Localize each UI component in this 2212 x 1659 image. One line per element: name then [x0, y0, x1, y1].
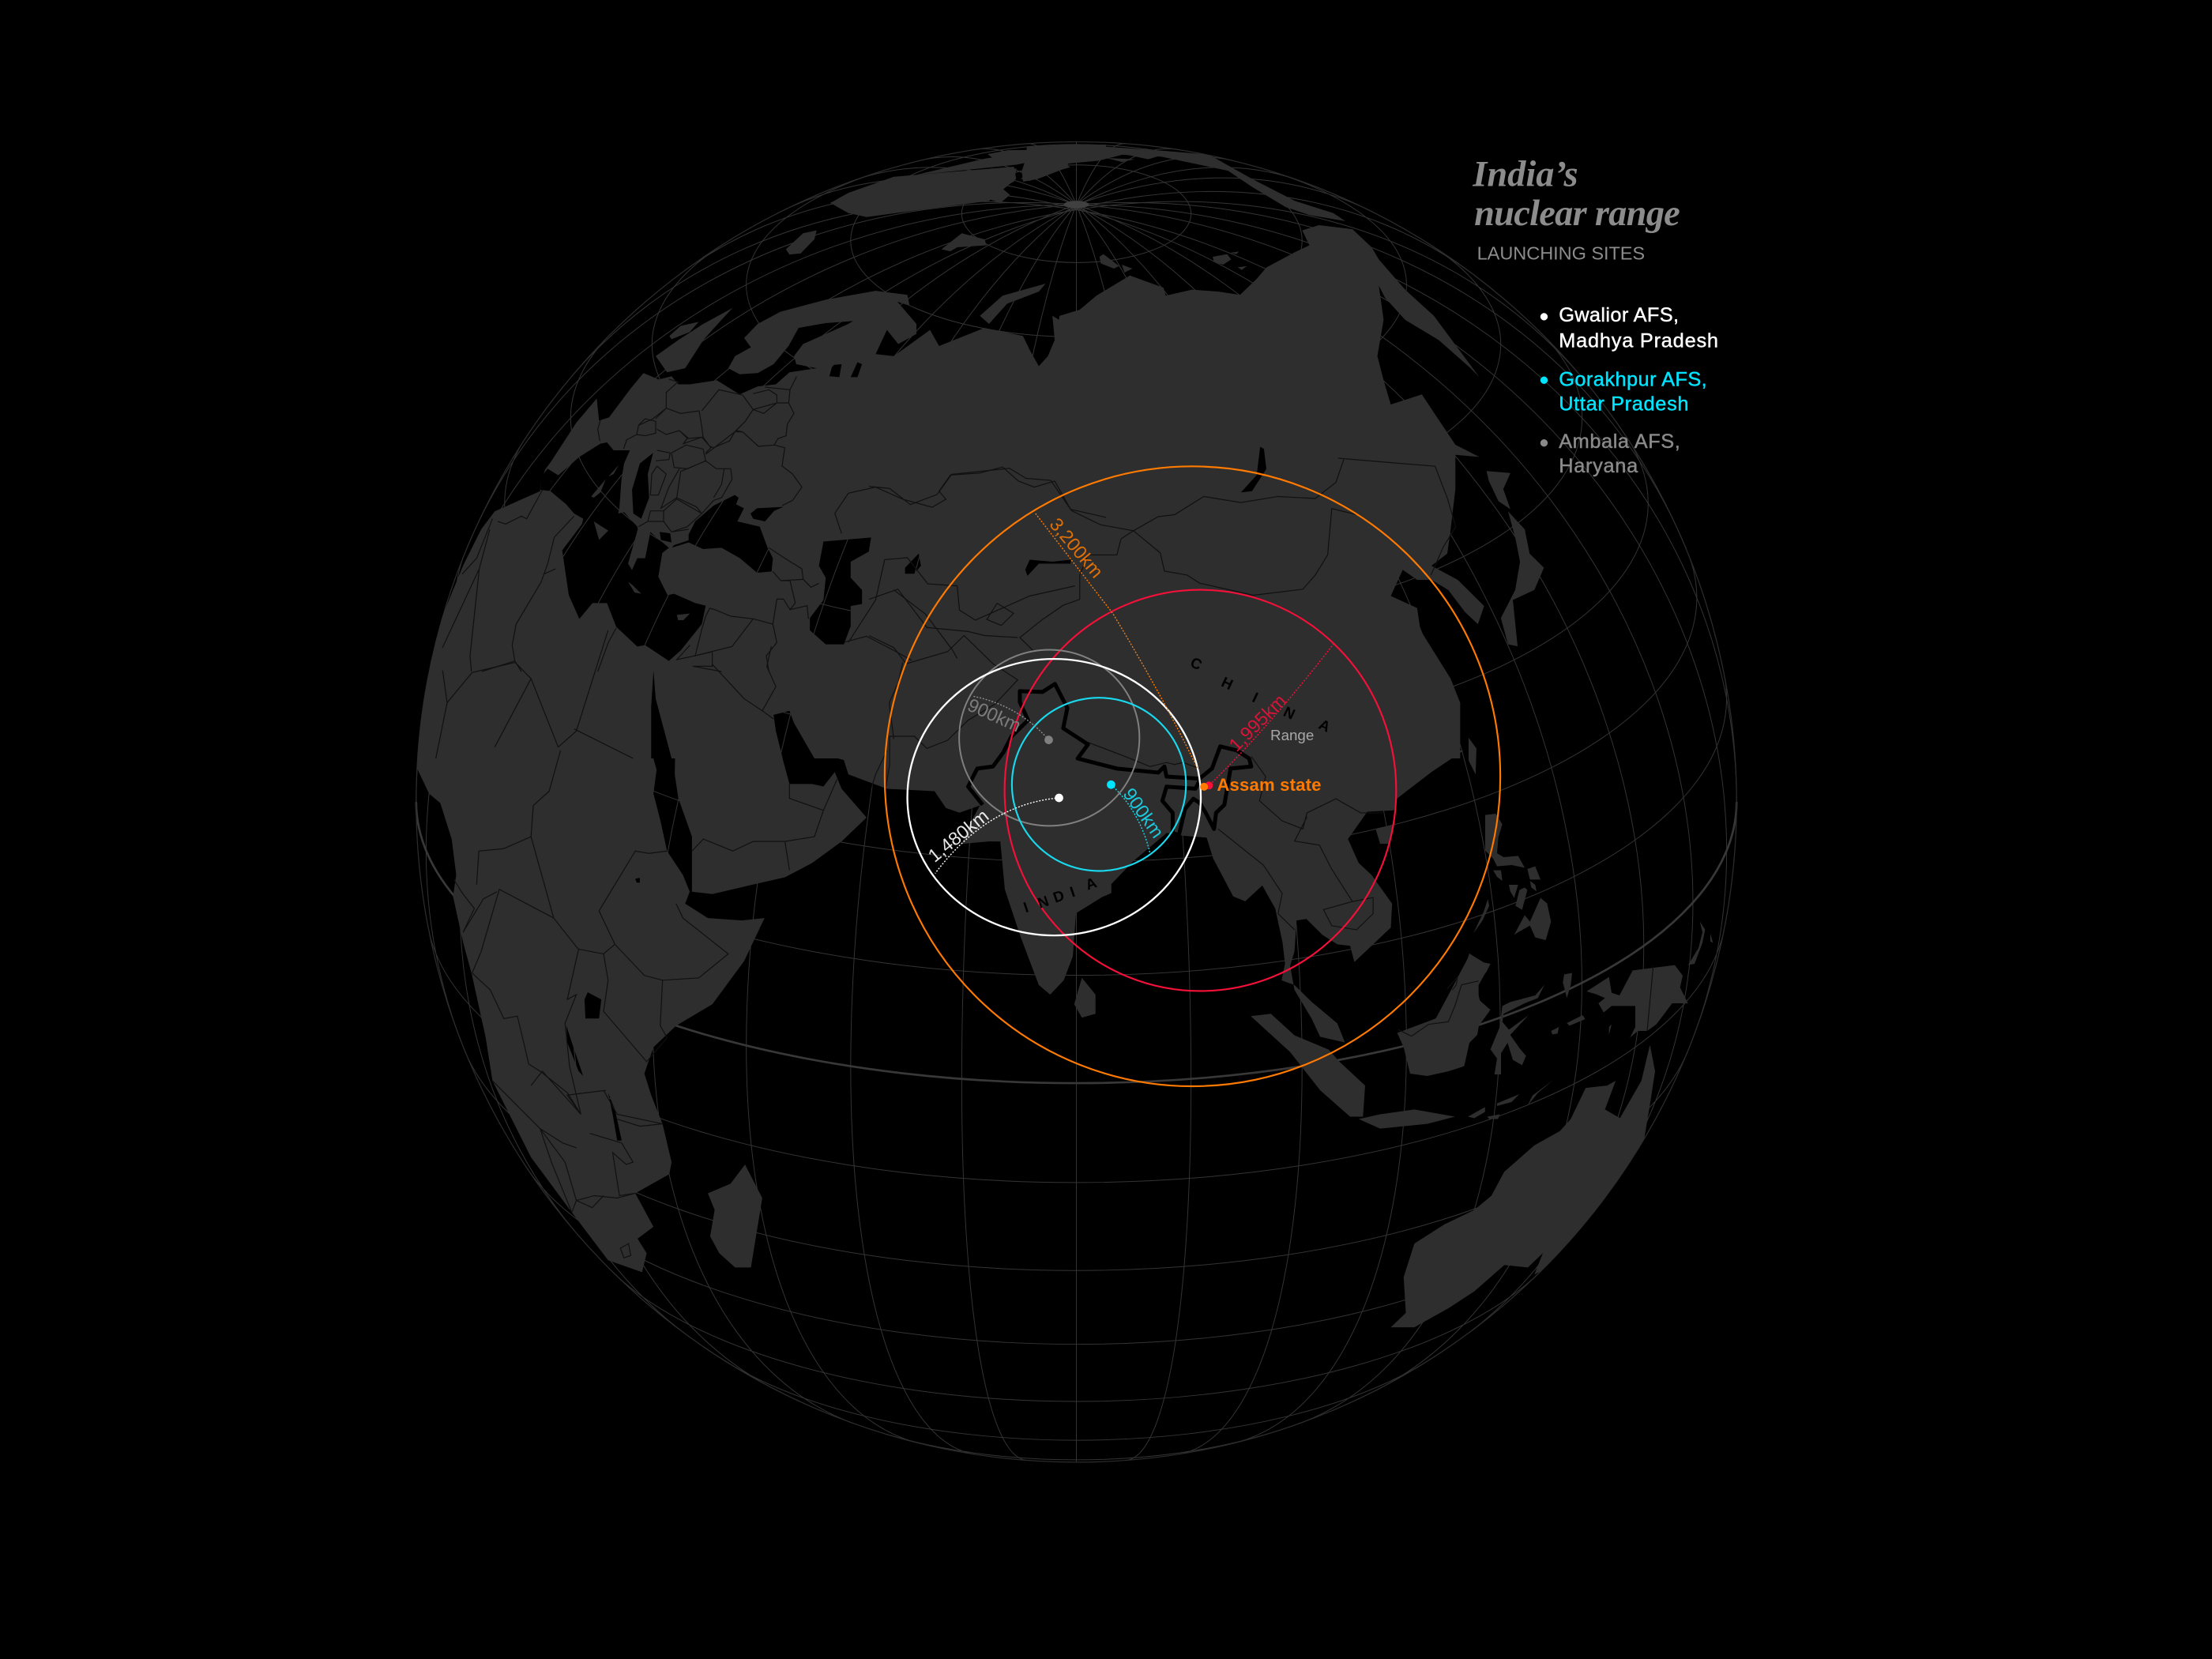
legend [1540, 304, 1718, 477]
label: Assam state: Assam state [1217, 775, 1321, 795]
graticule [416, 141, 1736, 1462]
radius: 1,480km [935, 798, 1059, 874]
subtitle: LAUNCHING SITES [1477, 243, 1645, 264]
borders: Africa and Arabia [454, 750, 887, 1258]
launch site: Gwalior [1055, 794, 1063, 802]
legend item: Gwalior: Madhya Pradesh [1559, 329, 1718, 352]
borders: Iran, central Asia, Sahara [436, 467, 1106, 758]
title: nuclear range [1474, 194, 1680, 234]
label: Range: Range [1270, 727, 1314, 743]
launch site: Gorakhpur [1107, 781, 1115, 789]
title [1472, 155, 1680, 234]
label: 3,200km: 3,200km [1046, 514, 1108, 582]
land: Europe, west Asia, north Africa [413, 145, 1106, 758]
borders: Borneo, Malaya, New Guinea [1398, 966, 1653, 1036]
label: INDIA: INDIA [1021, 874, 1099, 916]
legend item: Gorakhpur: Gorakhpur AFS, [1559, 368, 1707, 390]
land: Arctic islands [988, 145, 1247, 273]
globe [408, 141, 1736, 1462]
legend item: Gorakhpur: Uttar Pradesh [1559, 393, 1689, 416]
north pole glow [1063, 201, 1089, 209]
land: Philippines, Sulawesi, Moluccas, New Guinea [1459, 814, 1713, 1106]
inland seas and lakes [540, 362, 1266, 1141]
target marker: Assam red [1205, 781, 1213, 789]
launch site: Ambala [1044, 735, 1053, 744]
land masses [408, 145, 1713, 1327]
radius: Ambala 900km [972, 696, 1049, 740]
borders: Europe, Turkey, Levant, north Africa [442, 377, 819, 672]
legend item: Ambala [1540, 431, 1680, 477]
islands within the Mediterranean [591, 465, 690, 620]
range circle: Assam 3,200km [885, 466, 1500, 1086]
range circle: Ambala 900km [959, 649, 1139, 826]
range circle: Gorakhpur 900km [1012, 698, 1186, 871]
borders: east and southeast Asia [869, 458, 1456, 930]
land: southeast Asia, Sumatra, Java, Borneo, Australia [1102, 750, 1655, 1327]
range circle: Gwalior 1,480km [908, 659, 1201, 935]
label: Gorakhpur 900km: 900km [1119, 784, 1168, 842]
radius: 1,995km [1209, 644, 1334, 785]
land: Siberia, east Asia, Japan, Arctic [1022, 145, 1544, 758]
label: Ambala 900km: 900km [965, 694, 1024, 736]
label: 1,995km: 1,995km [1225, 690, 1290, 755]
legend item: Gwalior [1540, 304, 1718, 352]
India thick border [969, 684, 1251, 835]
country borders [436, 377, 1653, 1258]
legend item: Gorakhpur [1540, 368, 1707, 416]
radius: Gorakhpur 900km [1111, 784, 1150, 853]
radius lines [935, 514, 1334, 874]
range circle: Assam 1,995km [1005, 590, 1396, 991]
legend item: Gwalior: Gwalior AFS, [1559, 304, 1679, 326]
radius: 3,200km [1036, 514, 1198, 769]
label: CHINA: CHINA [1188, 653, 1334, 735]
graticule over inland seas [550, 365, 1264, 1100]
legend item: Ambala: Haryana [1559, 455, 1638, 477]
legend item: Ambala: Ambala AFS, [1559, 431, 1680, 453]
land: Africa, Arabia, India, Madagascar, Sri Lanka [408, 750, 1112, 1272]
label: 1,480km: 1,480km [924, 805, 992, 866]
infographic: India's nuclear range [416, 141, 1738, 1463]
title: India’s [1472, 155, 1578, 195]
target marker: Assam orange [1200, 783, 1208, 791]
land: Taiwan [1469, 738, 1477, 774]
